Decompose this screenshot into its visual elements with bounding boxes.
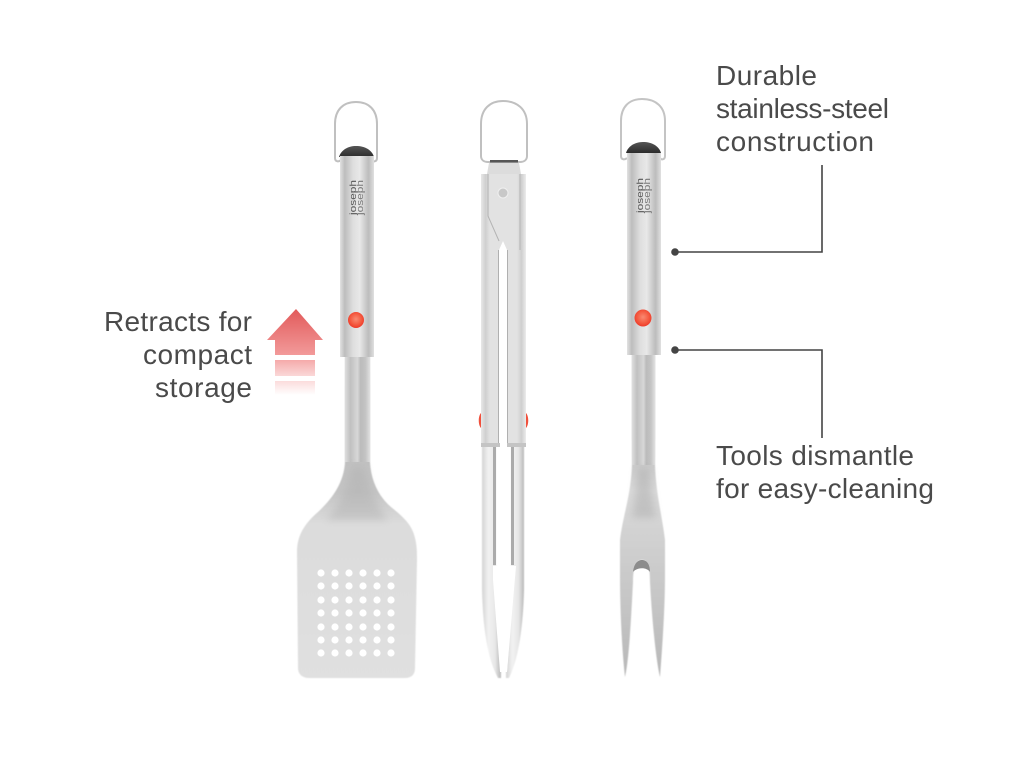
tongs inner rods xyxy=(493,447,514,565)
callout: tools dismantle: for easy-cleaning xyxy=(716,473,934,504)
fork brand mark: joseph xyxy=(635,178,645,214)
fork handle tube xyxy=(627,153,661,355)
tongs hinge outline xyxy=(488,174,520,250)
tongs top tab xyxy=(487,163,521,174)
leader line: durable construction xyxy=(671,165,822,256)
spatula brand mark: joseph xyxy=(348,180,358,216)
callout: durable construction xyxy=(716,60,889,157)
spatula lower shaft and head xyxy=(297,357,417,678)
tongs inner jaw xyxy=(493,566,513,672)
tongs lower left arm xyxy=(482,446,501,678)
tongs collars xyxy=(481,443,526,447)
leader line: tools dismantle xyxy=(671,346,822,438)
spatula shaft shading xyxy=(345,357,370,462)
callout: durable construction: construction xyxy=(716,126,874,157)
fork slot shadow xyxy=(633,560,650,572)
callout: durable construction: stainless-steel xyxy=(716,93,889,124)
callout: tools dismantle: Tools dismantle xyxy=(716,440,914,471)
spatula tool xyxy=(297,102,417,678)
tongs pivot rivet xyxy=(498,188,508,198)
callout: tools dismantle xyxy=(716,440,934,504)
spatula perforations xyxy=(317,569,395,657)
fork dark end cap xyxy=(626,142,661,153)
spatula handle tube xyxy=(340,156,374,357)
callout: retracts for compact storage: compact xyxy=(143,339,252,370)
fork tool xyxy=(620,99,665,677)
tongs slot edges xyxy=(498,250,508,446)
spatula hanging loop xyxy=(335,102,377,161)
tongs tool xyxy=(479,101,528,678)
spatula red button xyxy=(348,312,364,328)
tongs hanging loop xyxy=(481,101,527,162)
callout: retracts for compact storage: storage xyxy=(155,372,252,403)
spatula brand mark second line: joseph xyxy=(355,180,365,216)
fork neck shadow xyxy=(632,468,656,518)
fork brand mark second line: joseph xyxy=(642,178,652,214)
tongs upper body xyxy=(481,174,526,446)
arrow: retract upward xyxy=(267,309,323,395)
fork shaft shading xyxy=(632,355,655,465)
spatula dark end cap xyxy=(339,146,374,157)
spatula neck shadow xyxy=(326,466,388,520)
callout: retracts for compact storage: Retracts for xyxy=(104,306,252,337)
tongs lower right arm xyxy=(506,446,524,678)
fork red button xyxy=(634,310,652,326)
tongs red buttons xyxy=(479,413,528,428)
callout: retracts for compact storage xyxy=(104,306,252,403)
callout: durable construction: Durable xyxy=(716,60,817,91)
fork shaft and tines xyxy=(620,355,665,677)
fork hanging loop xyxy=(621,99,665,159)
